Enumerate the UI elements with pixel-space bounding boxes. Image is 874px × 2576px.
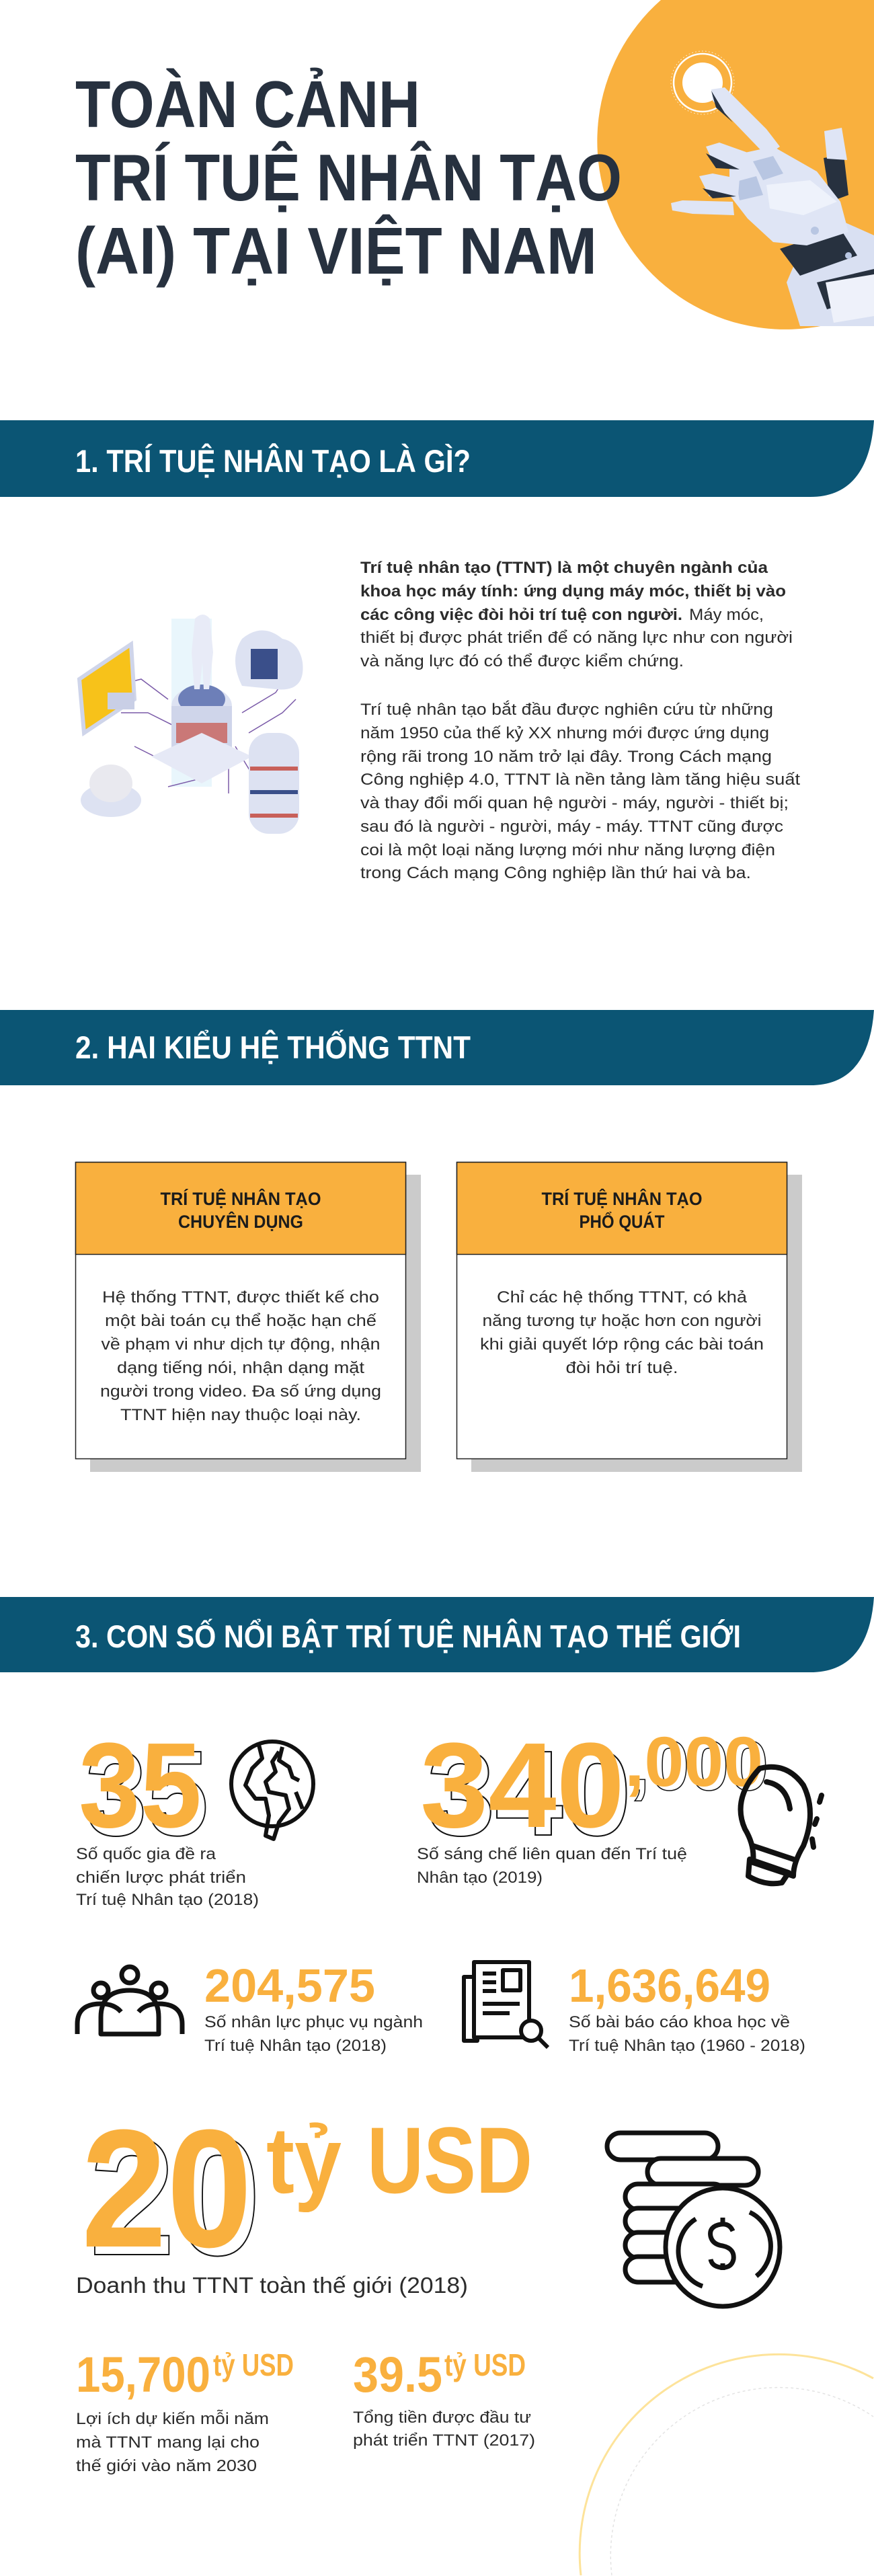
text block: section 1 definition: trong Cách mạng Công nghiệp lần thứ hai và ba. — [360, 864, 751, 882]
icon: coin stack — [607, 2133, 780, 2306]
card: general AI: năng tương tự hoặc hơn con người — [483, 1312, 761, 1330]
hero: orange circle with robot hand — [597, 0, 874, 329]
title: TRÍ TUỆ NHÂN TẠO — [75, 141, 622, 214]
text block: section 1 definition: và năng lực đó có thể được kiểm chứng. — [360, 652, 684, 670]
text block: section 1 definition: coi là một loại năng lượng mới như năng lượng điện — [360, 841, 775, 859]
text block: section 1 definition: Trí tuệ nhân tạo bắt đầu được nghiên cứu từ những — [360, 701, 773, 719]
stat: 35 countries: Trí tuệ Nhân tạo (2018) — [76, 1891, 259, 1909]
stat: 1,636,649 papers: Trí tuệ Nhân tạo (1960 - 2018) — [569, 2037, 805, 2055]
card: narrow AI: về phạm vi như dịch tự động, nhận — [101, 1335, 381, 1354]
stat: 340,000 patents: ,000 — [625, 1723, 763, 1801]
stat: 340,000 patents: Nhân tạo (2019) — [417, 1869, 543, 1887]
icon: people — [77, 1967, 182, 2034]
stat: 35 countries: Số quốc gia đề ra — [76, 1845, 216, 1863]
stat: 15,700 billion USD: 15,700 — [76, 2347, 210, 2403]
stat: 204,575 workforce — [77, 1959, 423, 2055]
card: narrow AI — [75, 1162, 421, 1472]
text block: section 1 definition: sau đó là người - người, máy - máy. TTNT cũng được — [360, 818, 783, 836]
stat: 340,000 patents: Số sáng chế liên quan đến Trí tuệ — [417, 1845, 687, 1863]
title — [75, 67, 622, 288]
stat: 35 countries: 35 — [85, 1726, 208, 1861]
stat: 204,575 workforce: Trí tuệ Nhân tạo (2018) — [204, 2037, 387, 2055]
section banner 2: 2. HAI KIỂU HỆ THỐNG TTNT — [75, 1029, 471, 1065]
text block: section 1 definition: rộng rãi trong 10 năm trở lại đây. Trong Cách mạng — [360, 748, 772, 766]
stat: 204,575 workforce: Số nhân lực phục vụ ngành — [204, 2013, 423, 2031]
card: general AI: đòi hỏi trí tuệ. — [566, 1359, 678, 1377]
card: general AI: Chỉ các hệ thống TTNT, có khả — [497, 1288, 748, 1306]
stat: 1,636,649 papers: 1,636,649 — [569, 1959, 770, 2012]
card: general AI: khi giải quyết lớp rộng các bài toán — [480, 1335, 764, 1354]
stat: 204,575 workforce: 204,575 — [204, 1959, 375, 2012]
text block: section 1 definition: Máy móc, — [689, 606, 764, 624]
stat: 20 billion USD revenue: tỷ — [266, 2107, 342, 2213]
stat: 15,700 billion USD — [76, 2347, 294, 2475]
text block: section 1 definition: năm 1950 của thế kỷ XX nhưng mới được ứng dụng — [360, 724, 769, 742]
card: narrow AI: dạng tiếng nói, nhận dạng mặt — [117, 1359, 364, 1377]
stat: 39.5 billion USD: 39.5 — [353, 2347, 442, 2403]
stat: 35 countries — [76, 1718, 313, 1909]
icon: touch ring — [671, 51, 734, 114]
icon: light bulb — [741, 1767, 822, 1883]
stat: 15,700 billion USD: thế giới vào năm 2030 — [76, 2457, 257, 2475]
stat: 39.5 billion USD: Tổng tiền được đầu tư — [353, 2409, 531, 2427]
stat: 20 billion USD revenue: 20 — [81, 2095, 252, 2282]
text block: section 1 definition: khoa học máy tính: ứng dụng máy móc, thiết bị vào — [360, 582, 786, 600]
stat: 20 billion USD revenue: 20 — [89, 2103, 261, 2290]
section banner 3: 3. CON SỐ NỔI BẬT TRÍ TUỆ NHÂN TẠO THẾ GIỚI — [75, 1618, 741, 1654]
text block: section 1 definition: Trí tuệ nhân tạo (TTNT) là một chuyên ngành của — [360, 559, 768, 577]
title: (AI) TẠI VIỆT NAM — [75, 214, 597, 288]
stat: 20 billion USD revenue — [76, 2095, 780, 2306]
text block: section 1 definition: thiết bị được phát triển để có năng lực như con người — [360, 629, 793, 647]
section banner 1: 1. TRÍ TUỆ NHÂN TẠO LÀ GÌ? — [75, 443, 471, 479]
section banner 3 — [0, 1597, 874, 1672]
stat: 340,000 patents: ,000 — [630, 1727, 768, 1805]
stat: 35 countries: 35 — [79, 1718, 202, 1853]
card: general AI — [457, 1162, 802, 1472]
stat: 340,000 patents — [417, 1718, 822, 1887]
icon: document with magnifier — [464, 1962, 548, 2047]
icon: robot hand — [671, 87, 874, 326]
text block: section 1 definition: các công việc đòi hỏi trí tuệ con người. — [360, 606, 682, 624]
stat: 39.5 billion USD — [353, 2347, 535, 2450]
stat: 39.5 billion USD: phát triển TTNT (2017) — [353, 2431, 535, 2450]
stat: 20 billion USD revenue: Doanh thu TTNT toàn thế giới (2018) — [76, 2273, 468, 2298]
stat: 20 billion USD revenue: USD — [367, 2107, 532, 2213]
stat: 1,636,649 papers: Số bài báo cáo khoa học về — [569, 2013, 790, 2031]
illustration: AI platform — [79, 615, 303, 834]
stat: 15,700 billion USD: mà TTNT mang lại cho — [76, 2433, 260, 2452]
card: general AI: TRÍ TUỆ NHÂN TẠO — [542, 1188, 702, 1209]
section banner 1 — [0, 420, 874, 497]
stat: 35 countries: chiến lược phát triển — [76, 1869, 246, 1887]
text block: section 1 definition: Công nghiệp 4.0, TTNT là nền tảng làm tăng hiệu suất — [360, 771, 800, 789]
stat: 1,636,649 papers — [464, 1959, 805, 2055]
stat: 15,700 billion USD: tỷ USD — [213, 2347, 294, 2382]
card: narrow AI: TRÍ TUỆ NHÂN TẠO — [160, 1188, 321, 1209]
card: general AI: PHỔ QUÁT — [580, 1211, 665, 1232]
card: narrow AI: TTNT hiện nay thuộc loại này. — [120, 1406, 361, 1424]
card: narrow AI: Hệ thống TTNT, được thiết kế cho — [102, 1288, 379, 1306]
card: narrow AI: CHUYÊN DỤNG — [178, 1211, 303, 1232]
icon: globe — [231, 1742, 313, 1839]
text block: section 1 definition — [360, 559, 800, 882]
card: narrow AI: người trong video. Đa số ứng dụng — [100, 1382, 381, 1401]
card: narrow AI: một bài toán cụ thể hoặc hạn chế — [105, 1312, 377, 1330]
text block: section 1 definition: và thay đổi mối quan hệ người - máy, người - thiết bị; — [360, 794, 789, 812]
stat: 340,000 patents: 340 — [427, 1726, 631, 1861]
stat: 340,000 patents: 340 — [420, 1718, 625, 1853]
stat: 39.5 billion USD: tỷ USD — [444, 2347, 526, 2382]
title: TOÀN CẢNH — [75, 67, 420, 141]
stat: 15,700 billion USD: Lợi ích dự kiến mỗi năm — [76, 2410, 269, 2428]
decorative circle bottom right — [580, 2354, 873, 2575]
section banner 2 — [0, 1010, 874, 1085]
